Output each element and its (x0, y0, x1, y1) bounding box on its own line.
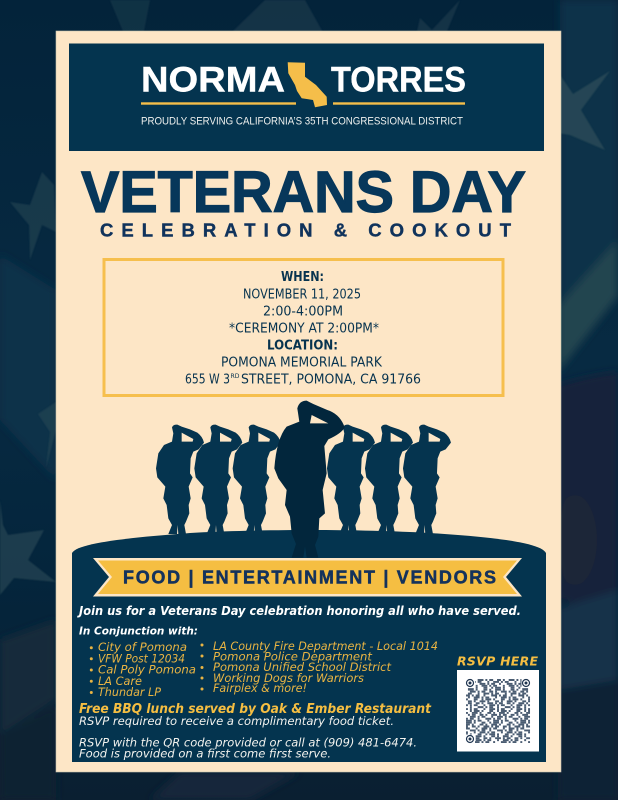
lead soldier saluting (274, 401, 345, 558)
subtitle: CELEBRATION & COOKOUT (100, 220, 512, 241)
event details box (104, 260, 503, 396)
partners list right (200, 639, 438, 695)
bottom information panel with hill (72, 401, 546, 762)
partners heading: In Conjunction with: (79, 625, 198, 638)
ribbon text: FOOD | ENTERTAINMENT | VENDORS (123, 568, 496, 588)
partners list left: City of Pomona (98, 640, 187, 654)
when heading: WHEN: (281, 270, 324, 285)
partners list right: Pomona Unified School District (213, 660, 391, 674)
RSVP heading: RSVP HERE (457, 654, 538, 669)
soldiers in line, left (156, 425, 281, 534)
address: RD (230, 372, 240, 380)
tagline: PROUDLY SERVING CALIFORNIA’S 35TH CONGRESSIONAL DISTRICT (141, 115, 463, 127)
time: 2:00-4:00PM (263, 304, 343, 320)
ribbon banner (93, 558, 522, 596)
location heading: LOCATION: (267, 338, 338, 354)
icon: California map (288, 62, 327, 107)
title: VETERANS DAY (81, 160, 526, 225)
first come note: Food is provided on a first come first serve. (79, 747, 331, 761)
partners list left: VFW Post 12034 (98, 652, 185, 666)
underline right (333, 102, 465, 105)
name: Torres: TORRES (331, 61, 466, 100)
QR code (457, 670, 539, 752)
address: STREET, POMONA, CA 91766 (241, 372, 421, 388)
partners list left: Cal Poly Pomona (98, 662, 196, 676)
free lunch heading: Free BBQ lunch served by Oak & Ember Restaurant (79, 702, 432, 717)
food ticket note: RSVP required to receive a complimentary food ticket. (79, 714, 394, 728)
underline left (141, 102, 296, 105)
partners list left (90, 640, 196, 699)
partners list right: LA County Fire Department - Local 1014 (213, 639, 438, 653)
soldiers silhouette (156, 401, 451, 558)
name: Norma: NORMA (141, 61, 285, 100)
partners list right: Fairplex & more! (213, 681, 307, 695)
RSVP instructions: RSVP with the QR code provided or call at (909) 481-6474. (79, 736, 417, 750)
header banner (69, 44, 544, 151)
invitation line: Join us for a Veterans Day celebration honoring all who have served. (77, 604, 521, 618)
venue: POMONA MEMORIAL PARK (221, 354, 383, 370)
partners list left: Thundar LP (98, 685, 161, 699)
partners list right: Working Dogs for Warriors (213, 671, 364, 685)
poster panel (56, 31, 561, 772)
partners list left: LA Care (98, 674, 142, 688)
date: NOVEMBER 11, 2025 (243, 286, 361, 302)
partners list right: Pomona Police Department (213, 650, 372, 664)
ceremony time: *CEREMONY AT 2:00PM* (229, 320, 379, 336)
soldiers in line, right (327, 425, 451, 534)
address: 655 W 3 (185, 372, 230, 388)
